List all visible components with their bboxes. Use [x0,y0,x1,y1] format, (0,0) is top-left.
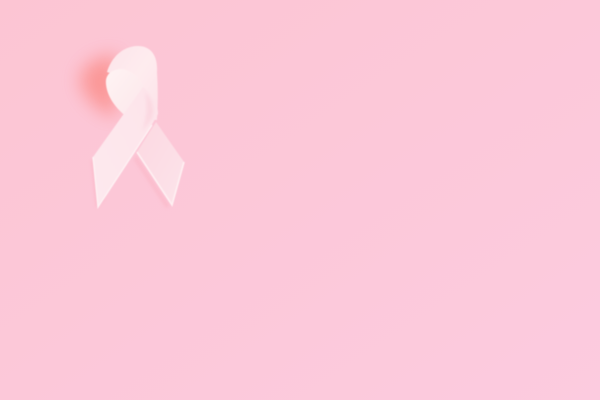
right tail highlight edge [137,152,184,205]
fold shading [142,92,153,132]
front band highlight edge [93,125,152,207]
ribbon loop inner [106,69,144,118]
front band [93,87,158,207]
ribbon [93,46,184,207]
right tail [137,122,184,205]
ribbon shadow [80,56,170,208]
ribbon loop back [107,46,158,120]
